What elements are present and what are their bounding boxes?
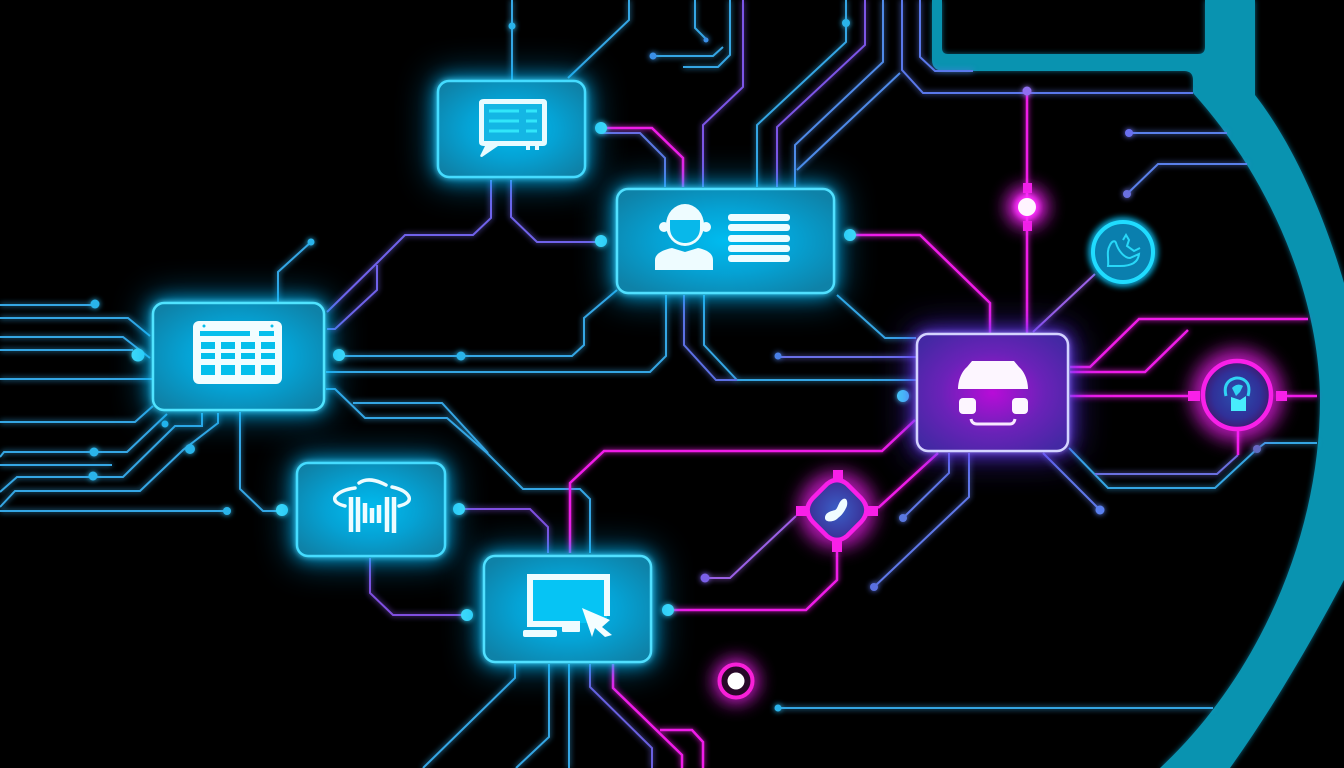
card: person profile [612,184,839,298]
icon: chat bubble [479,99,547,157]
card: purple vehicle [912,329,1073,456]
card: message [433,76,590,182]
icon: magenta headset node [1188,349,1287,441]
node: magenta connector on vertical line [1007,183,1047,231]
icon: phone circle [1088,217,1158,287]
card: cloud server [292,458,450,561]
card: computer cursor [479,551,656,667]
icon: text lines [728,214,790,262]
violet circuit traces [327,0,1247,768]
terminal dots [88,19,1261,712]
magenta circuit traces [570,92,1317,768]
icon: table [193,321,282,384]
node: magenta ring [714,659,758,703]
icon: cloud bars [335,480,409,533]
card: calendar grid [148,298,329,415]
icon: magenta diamond node [796,470,878,552]
icon: person [655,204,713,270]
teal frame and arc [932,0,1344,768]
icon: vehicle [958,361,1028,424]
icon: monitor and cursor [523,577,612,637]
